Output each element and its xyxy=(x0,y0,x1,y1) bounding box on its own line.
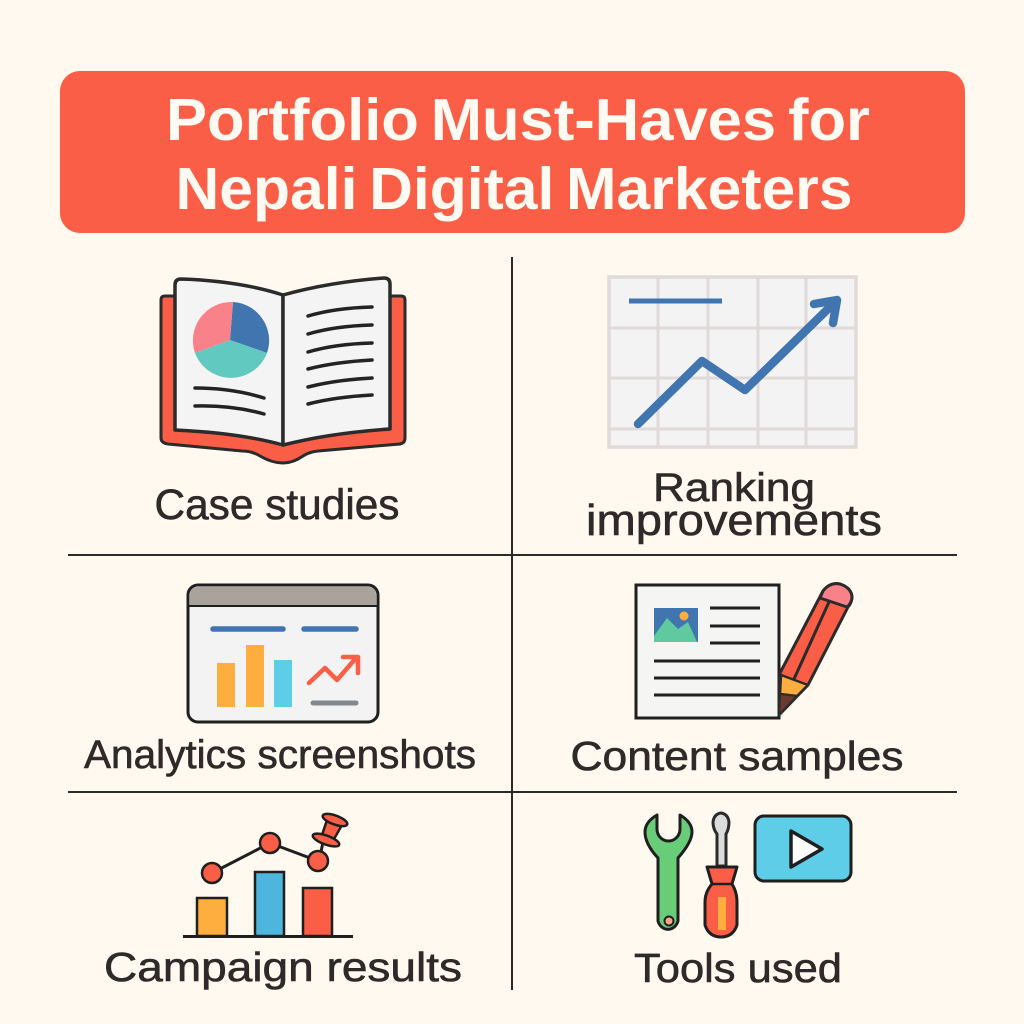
icon: ranking line chart xyxy=(609,277,856,447)
icon: document and pencil xyxy=(636,584,852,718)
label: tools used: Tools used xyxy=(634,945,842,991)
title: Portfolio Must-Haves for xyxy=(166,87,870,153)
panel: content samples xyxy=(570,584,904,779)
label: content samples: Content samples xyxy=(570,733,904,779)
label: analytics screenshots: Analytics screenshots xyxy=(84,733,476,777)
title xyxy=(60,71,965,233)
panel: ranking improvements: improvements xyxy=(586,496,882,545)
screwdriver xyxy=(713,813,729,866)
icon: bars and pin xyxy=(183,811,353,936)
panel: campaign results xyxy=(104,811,462,990)
label: case studies: Case studies xyxy=(154,481,400,529)
label: ranking improvements: Ranking xyxy=(653,466,815,510)
icon: open book with pie chart xyxy=(161,278,405,463)
pie chart xyxy=(193,302,269,378)
panel: case studies xyxy=(154,278,405,529)
label: campaign results: Campaign results xyxy=(104,944,462,990)
icon: wrench, screwdriver and video xyxy=(645,813,851,937)
wrench xyxy=(645,815,692,929)
icon: analytics window xyxy=(188,585,378,722)
title: Nepali Digital Marketers xyxy=(176,156,852,222)
pin xyxy=(311,811,349,849)
panel: analytics screenshots xyxy=(84,585,476,777)
panel: tools used xyxy=(634,813,851,991)
video player xyxy=(755,816,851,881)
pencil xyxy=(779,584,852,715)
panel: ranking improvements xyxy=(586,277,882,545)
